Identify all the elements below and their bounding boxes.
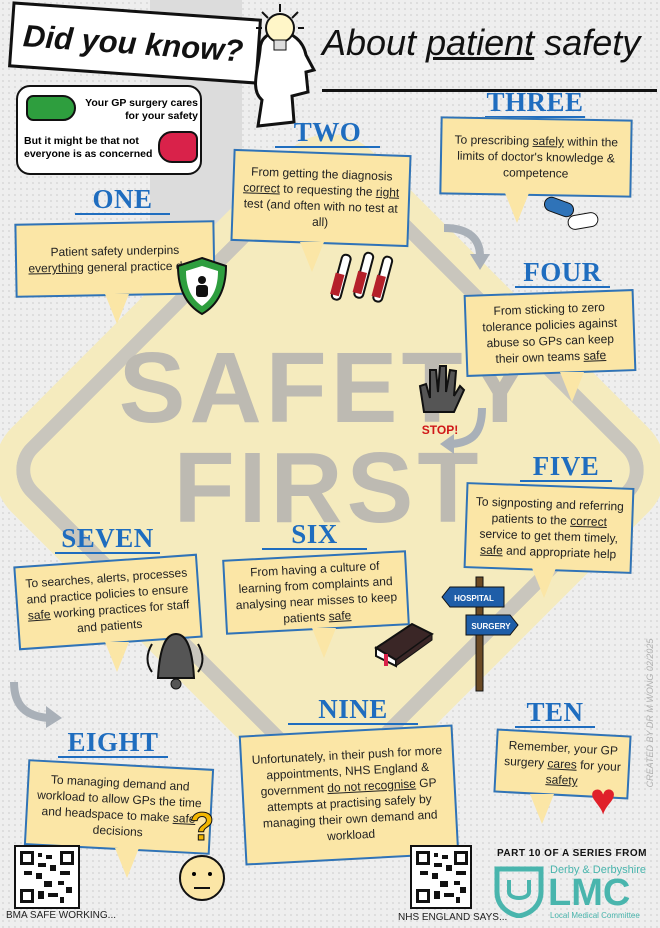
icon: bell (146, 633, 204, 690)
box seven (13, 554, 203, 650)
icon: glove stop (418, 365, 466, 437)
FOUR: FOUR (523, 257, 602, 287)
arrow four to five (440, 408, 486, 454)
box eight: To managing demand and workload to allow GPs the time and headspace to make safe decisions (37, 772, 202, 839)
icon: signpost: SURGERY (471, 622, 511, 631)
icon: red pointing hand (158, 131, 198, 163)
box one: Patient safety underpins everything general practice does (28, 243, 202, 276)
icon: pills (544, 196, 598, 230)
TEN (515, 698, 595, 728)
title box: Did you know? (22, 18, 244, 69)
intro box: But it might be that not everyone is as concerned (24, 135, 152, 160)
arrow seven to eight (10, 682, 62, 728)
box six: From having a culture of learning from complaints and analysing near misses to keep patients safe (235, 558, 397, 625)
subtitle: About patient safety (322, 22, 640, 63)
NINE: NINE (318, 694, 388, 724)
box three: To prescribing safely within the limits of doctor's knowledge & competence (454, 133, 618, 181)
title box (8, 1, 262, 85)
caption right: NHS ENGLAND SAYS... (398, 912, 507, 923)
box four: From sticking to zero tolerance policies against abuse so GPs can keep their own teams safe (482, 300, 617, 366)
icon: signpost (441, 576, 519, 692)
icon: signpost: HOSPITAL (454, 594, 494, 603)
box nine (239, 724, 459, 866)
box six (222, 550, 410, 635)
FIRST text: FIRST (174, 432, 482, 544)
subtitle (322, 22, 657, 92)
credit vertical: CREATED BY DR M WONG 02/2025 (645, 639, 655, 787)
box five: To signposting and referring patients to the correct service to get them timely, safe and appropriate help (476, 494, 624, 561)
FIVE: FIVE (533, 451, 599, 481)
LMC logo (494, 864, 646, 920)
intro box: Your GP surgery cares for your safety (85, 97, 198, 122)
LMC logo: Local Medical Committee (550, 911, 640, 920)
box two: From getting the diagnosis correct to requesting the right test (and often with no test at all) (243, 165, 400, 229)
box ten (493, 729, 632, 799)
intro box (16, 85, 202, 175)
icon: green pointing hand (26, 95, 76, 121)
TEN: TEN (526, 697, 584, 727)
box five (464, 482, 634, 574)
icon: head with lightbulb (254, 4, 316, 128)
safety sign diamond (0, 109, 660, 831)
FIVE (520, 452, 612, 482)
TWO (275, 118, 380, 148)
box four (464, 289, 636, 377)
arrow two to four (444, 224, 490, 270)
LMC logo: Derby & Derbyshire (550, 864, 646, 876)
box eight (24, 759, 214, 855)
TWO: TWO (294, 117, 361, 147)
SEVEN: SEVEN (61, 523, 154, 553)
box seven: To searches, alerts, processes and practice policies to ensure safe working practices for staff and patients (25, 565, 190, 635)
icon: face with question mark: ? (190, 805, 214, 849)
ONE: ONE (92, 184, 152, 214)
icon: shield (177, 257, 227, 316)
box ten: Remember, your GP surgery cares for your safety (504, 738, 621, 788)
box three (439, 116, 633, 198)
SIX: SIX (291, 519, 338, 549)
caption left: BMA SAFE WORKING... (6, 910, 116, 921)
icon: heart: ♥ (590, 775, 616, 824)
series text: PART 10 OF A SERIES FROM (497, 848, 647, 859)
SIX (262, 520, 367, 550)
box two (230, 149, 412, 247)
ONE (75, 185, 170, 215)
LMC logo: LMC (548, 872, 630, 914)
box nine: Unfortunately, in their push for more appointments, NHS England & government do not recognise GP attempts at practising safely by managing their own demand and workload (251, 743, 442, 843)
icon: face with question mark (179, 805, 225, 901)
THREE: THREE (486, 87, 584, 117)
icon: test tubes (330, 252, 394, 303)
SAFETY text: SAFETY (119, 332, 537, 444)
EIGHT: EIGHT (67, 727, 159, 757)
QR left (14, 845, 80, 909)
icon: glove stop: STOP! (422, 423, 458, 437)
background band (150, 0, 242, 260)
QR right (410, 845, 472, 909)
NINE (288, 695, 418, 725)
box one (14, 220, 216, 298)
icon: book (374, 622, 434, 668)
